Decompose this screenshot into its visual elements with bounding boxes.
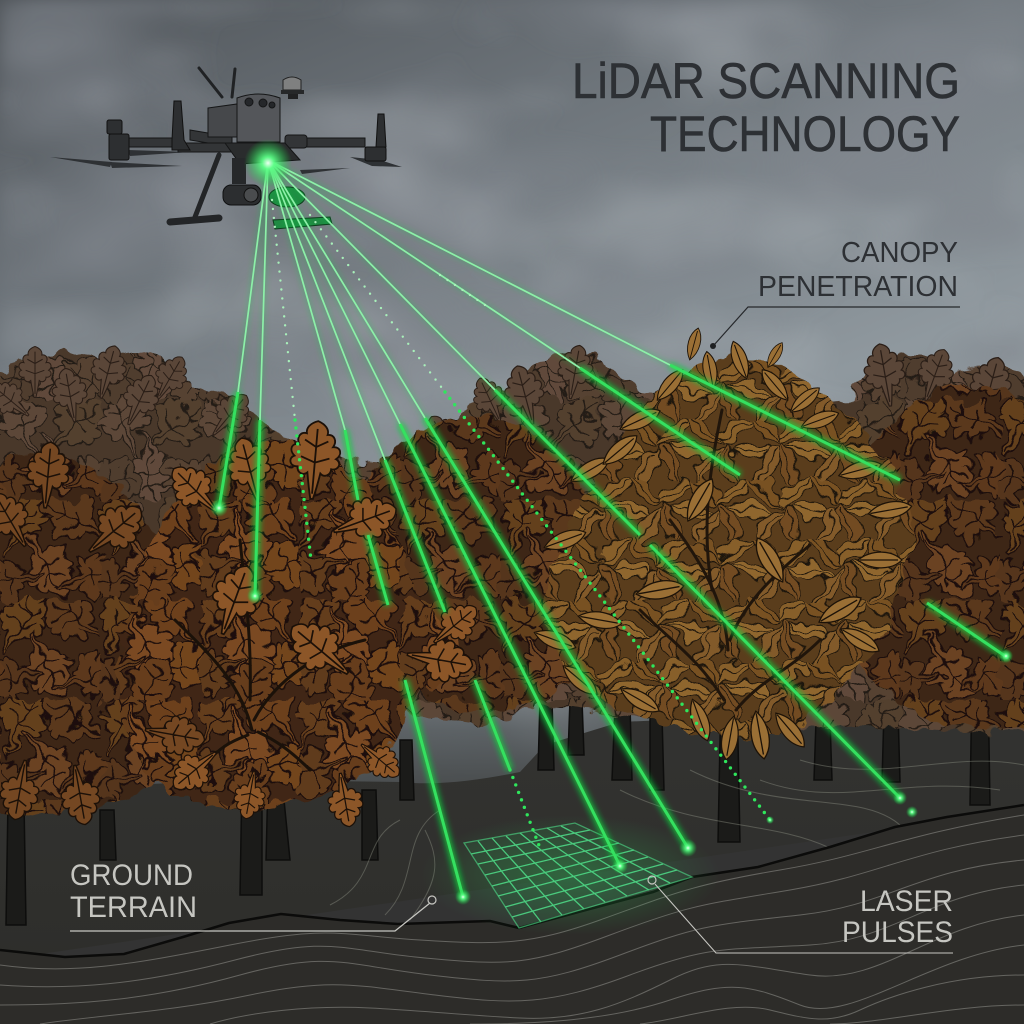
forest floor <box>0 700 1024 960</box>
terrain outline <box>0 805 1024 957</box>
drone <box>50 68 402 222</box>
strong beams in canopy <box>219 365 1008 897</box>
title <box>572 53 960 162</box>
label: laser pulses <box>648 876 953 953</box>
drone body <box>208 94 300 164</box>
left tree branches <box>175 540 365 770</box>
antennas <box>199 68 235 97</box>
laser emitter glow <box>244 139 292 187</box>
label: ground terrain <box>70 859 436 931</box>
sky background <box>0 0 1024 800</box>
scan grid on ground <box>420 815 720 935</box>
label: canopy penetration: CANOPY <box>841 237 958 269</box>
green lidar pod <box>269 187 332 229</box>
left foreground tree <box>0 419 487 830</box>
subsurface ground with contours <box>0 805 1024 1024</box>
far right tree canopy <box>843 386 1024 731</box>
label: ground terrain: GROUND <box>70 859 193 892</box>
label: canopy penetration: PENETRATION <box>758 271 958 303</box>
laser beams <box>219 160 1008 897</box>
rotor blades <box>50 150 402 174</box>
mid tree canopy <box>360 418 595 710</box>
ground contour lines on forest floor <box>330 760 1024 920</box>
tree trunks <box>6 640 990 925</box>
far left tree canopy <box>0 452 210 816</box>
beam end points <box>210 499 1013 905</box>
landing gear <box>170 155 219 222</box>
far left leaf highlights <box>0 440 208 828</box>
dotted beams <box>295 392 770 848</box>
label: laser pulses: LASER <box>860 885 953 918</box>
title: LiDAR SCANNING <box>572 53 960 109</box>
camera gimbal <box>223 158 261 205</box>
label: ground terrain: TERRAIN <box>70 891 197 924</box>
thin beams through sky <box>238 160 670 460</box>
background canopy <box>0 341 1024 780</box>
beam glow <box>219 160 1008 897</box>
GPS dome <box>281 77 304 99</box>
right foreground tree <box>532 327 1024 761</box>
label: laser pulses: PULSES <box>842 916 953 949</box>
motors <box>107 101 386 161</box>
right tree branches <box>640 410 820 710</box>
back canopy edge leaves <box>0 341 1017 472</box>
light leaf highlights <box>532 327 913 761</box>
label: canopy penetration <box>710 237 960 349</box>
title: TECHNOLOGY <box>650 106 960 162</box>
oak leaf highlights <box>160 419 487 830</box>
arms <box>128 130 365 152</box>
